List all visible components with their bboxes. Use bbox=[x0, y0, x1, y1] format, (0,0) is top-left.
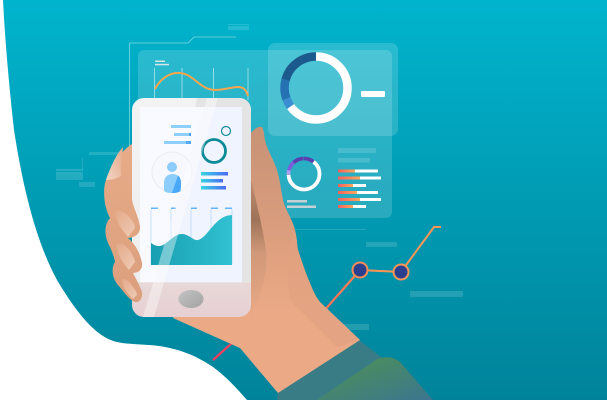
palm shade right bbox=[287, 230, 360, 347]
rings bbox=[202, 126, 230, 162]
frame lines bbox=[130, 37, 236, 147]
glare bbox=[143, 98, 218, 317]
green sleeve bbox=[317, 357, 433, 400]
thumb crease shadow bbox=[251, 180, 266, 313]
text lines bbox=[201, 172, 228, 190]
phone screen bbox=[140, 107, 242, 282]
stacked bars bbox=[338, 148, 381, 208]
menu bars bbox=[164, 125, 191, 144]
avatar bbox=[152, 152, 192, 193]
nail: middle bbox=[115, 211, 135, 237]
line chart bbox=[154, 60, 248, 100]
panel: big donut card bbox=[268, 43, 398, 136]
nail: index bbox=[106, 147, 123, 180]
sleeve cuff bbox=[277, 340, 433, 400]
hand: palm and thumb bbox=[173, 127, 360, 393]
panel: dashboard back bbox=[138, 50, 392, 218]
nail: little bbox=[122, 279, 137, 299]
finger silhouette bbox=[104, 144, 142, 302]
white value pill bbox=[361, 91, 385, 97]
hand: fingers bbox=[104, 144, 142, 302]
phone bbox=[132, 98, 251, 317]
small donut chart bbox=[288, 158, 320, 190]
big donut chart bbox=[284, 56, 348, 120]
area chart bbox=[151, 208, 232, 265]
phone body bbox=[132, 98, 251, 317]
home button bbox=[178, 290, 204, 308]
nail: ring bbox=[116, 243, 135, 270]
faint decorative bars bbox=[56, 24, 463, 330]
donut labels bbox=[287, 200, 316, 208]
growth line chart bbox=[213, 227, 441, 360]
